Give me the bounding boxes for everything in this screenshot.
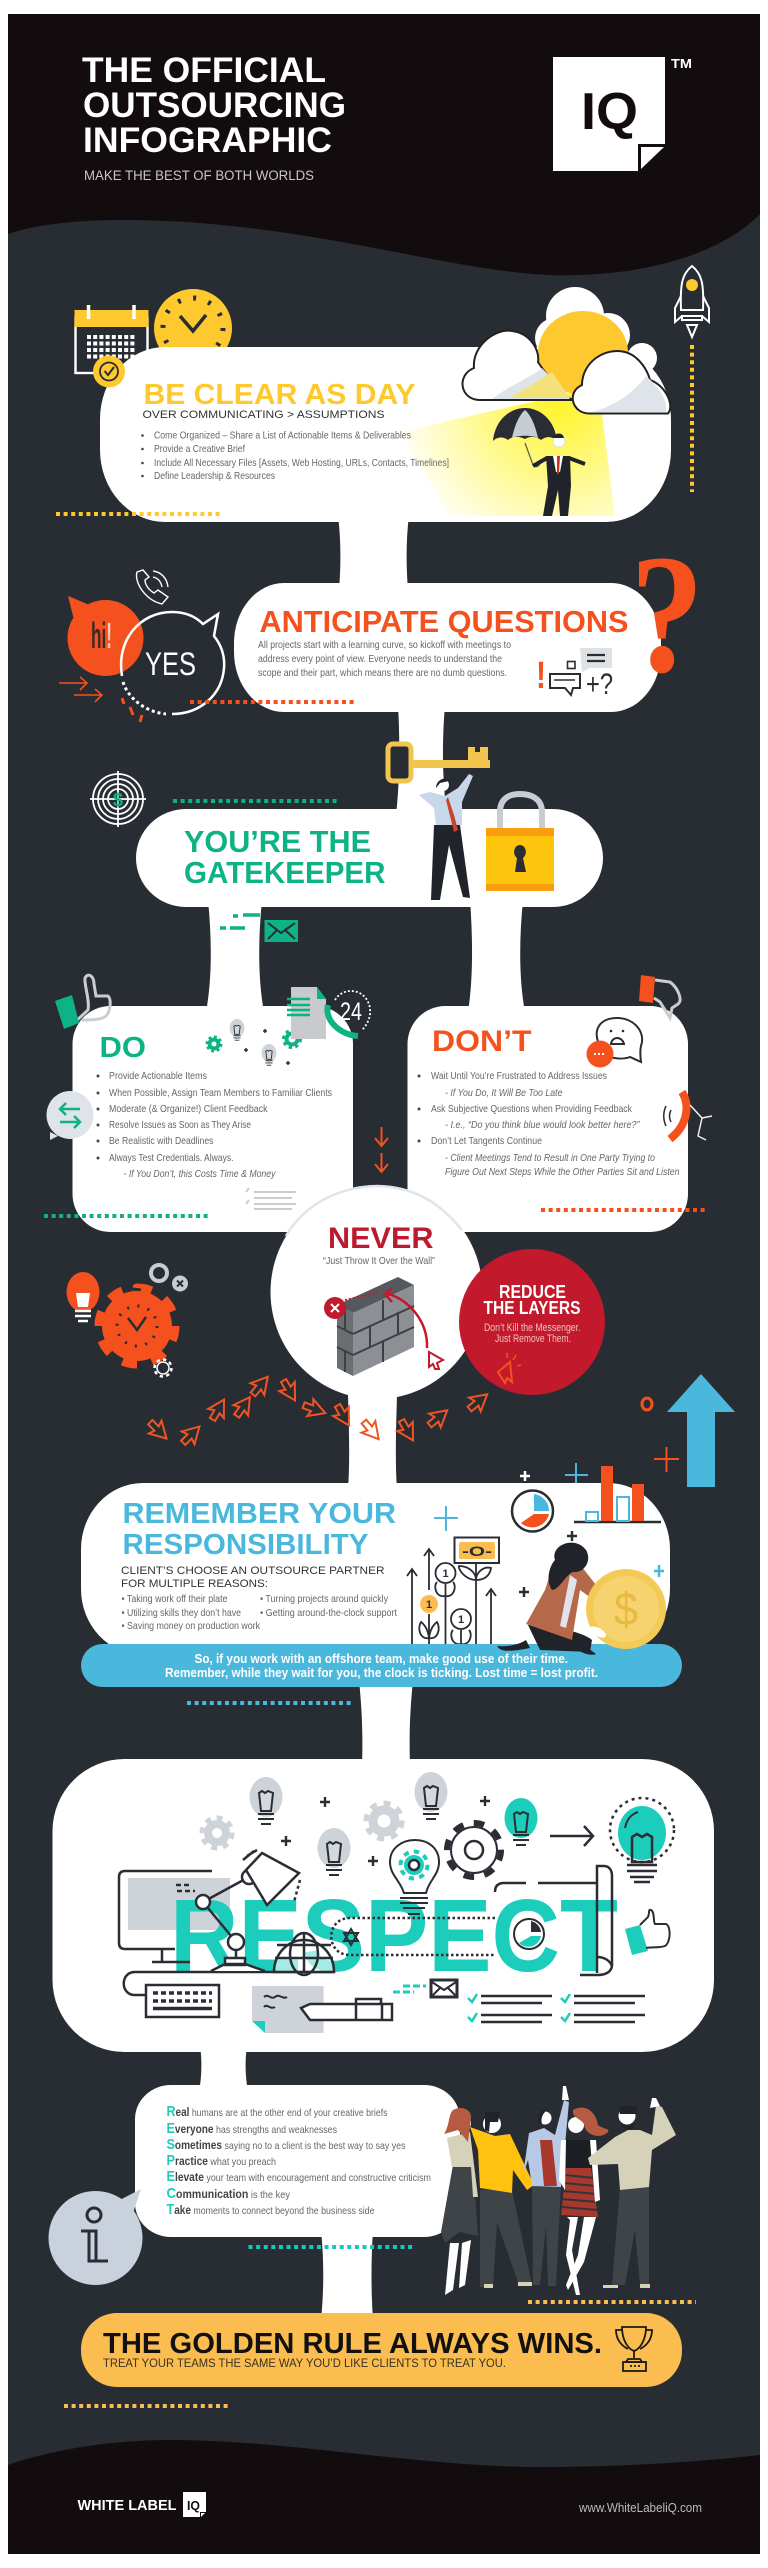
icon: target [90, 771, 146, 827]
icon: yes speech bubble [121, 612, 224, 714]
icon: key [388, 744, 490, 781]
bullet list: Moderate (& Organize!) Client Feedback [109, 1103, 268, 1115]
plant labels: 1 [426, 1599, 432, 1611]
line C: Communication is the key [166, 2185, 291, 2202]
callout: reduce the layers: Don’t Kill the Messenger. [484, 1322, 580, 1334]
bullet list: Figure Out Next Steps While the Other Parties Sit and Listen [445, 1166, 680, 1178]
icon: star gear [344, 1929, 358, 1945]
panel: anticipate questions [234, 583, 661, 712]
icon: brick wall [337, 1277, 414, 1376]
person 1: woman in grey skirt [441, 2108, 478, 2295]
reasons list: • Saving money on production work [122, 1620, 261, 1632]
header band [8, 14, 760, 275]
logo [553, 56, 692, 171]
illustration: money plants [407, 1538, 499, 1653]
title [82, 51, 346, 160]
subheading: FOR MULTIPLE REASONS: [121, 1578, 268, 1590]
plus marks: responsibility panel [434, 1506, 664, 1597]
banner: golden rule: TREAT YOUR TEAMS THE SAME WAY YOU’D LIKE CLIENTS TO TREAT YOU. [103, 2356, 506, 2370]
icon: discussion marks [536, 648, 613, 701]
icon: desk lamp [196, 1850, 300, 1971]
light beam [400, 392, 615, 516]
illustration: man with umbrella [493, 408, 585, 516]
bullet list: Provide a Creative Brief [154, 443, 245, 455]
panel: remember your responsibility [81, 1483, 670, 1655]
panel: don't [408, 1006, 688, 1232]
illustration: man reaching for key [419, 774, 473, 900]
icon: 24 hour phone: 24 [340, 998, 362, 1026]
callout: reduce the layers: Just Remove Them. [495, 1333, 571, 1345]
paragraph: All projects start with a learning curve, so kickoff with meetings to [258, 639, 511, 651]
icon: gear outline [447, 1823, 501, 1877]
arrows: orange [59, 677, 142, 722]
icon: document [287, 987, 326, 1039]
reasons list: • Utilizing skills they don’t have [122, 1607, 241, 1619]
icon: hi speech bubble [68, 596, 144, 676]
icon: phone [137, 570, 168, 604]
callout: reduce the layers [459, 1249, 605, 1395]
dotted line: yellow [56, 512, 223, 516]
bullet list: Provide Actionable Items [109, 1070, 207, 1082]
heading: GATEKEEPER [184, 856, 386, 890]
icons: plus marks [281, 1796, 490, 1866]
icon: envelope [393, 1980, 457, 1997]
illustration: woman and coin [497, 1543, 666, 1655]
heading: ANTICIPATE QUESTIONS [260, 604, 628, 639]
icon: target: $ [113, 790, 123, 810]
icon: discussion marks: +? [586, 668, 613, 701]
icon: scroll [495, 1866, 612, 1975]
icon: large teal bulb [610, 1798, 674, 1882]
subheading: OVER COMMUNICATING > ASSUMPTIONS [142, 409, 384, 421]
caption: “Just Throw It Over the Wall” [323, 1255, 435, 1267]
icons: small status circles and gear [151, 1265, 188, 1376]
panel: respect [52, 1759, 714, 2052]
icon: trophy [616, 2327, 652, 2371]
paragraph: address every point of view. Everyone needs to understand the [258, 653, 502, 665]
panel: you're the gatekeeper [136, 809, 603, 907]
paragraph [258, 639, 511, 679]
panel: be clear as day [100, 347, 671, 522]
bullet list [141, 430, 449, 482]
bullet list: - If You Do, It Will Be Too Late [445, 1087, 563, 1099]
icon: checklist [246, 1188, 296, 1209]
heading [184, 825, 386, 890]
icons: bulbs and gears [207, 1019, 300, 1065]
banner: golden rule [81, 2313, 682, 2387]
plant labels [426, 1543, 492, 1626]
connector: panel 1 to 2 [338, 515, 409, 590]
heading: RESPECT [170, 1878, 618, 1993]
heading: RESPONSIBILITY [122, 1529, 368, 1561]
panel: do [72, 1006, 353, 1232]
reasons list [122, 1593, 397, 1632]
dotted line: yellow [528, 2300, 696, 2304]
decorative marks: ring and plus [520, 1398, 679, 1487]
banner: lost time: So, if you work with an offshore team, make good use of their time. [194, 1651, 568, 1666]
paragraph: scope and their part, which means there are no dumb questions. [258, 667, 507, 679]
bullet list: Come Organized – Share a List of Actionable Items & Deliverables [154, 430, 411, 442]
connector: panel 2 to 3 [396, 705, 447, 815]
icon: thumbs up [625, 1910, 670, 1955]
icon: info bubble [48, 2189, 142, 2285]
line R: Real humans are at the other end of your creative briefs [166, 2103, 388, 2120]
dotted line: teal [248, 2245, 416, 2249]
footer logo [78, 2492, 206, 2517]
icon: thumbs up [55, 975, 110, 1029]
callout: reduce the layers: REDUCE [499, 1282, 566, 1302]
connector: respect to list [199, 2045, 248, 2092]
footer url: www.WhiteLabeliQ.com [578, 2500, 702, 2515]
icon: cursor click [498, 1353, 521, 1383]
connector: never to remember [348, 1395, 397, 1490]
banner: golden rule: THE GOLDEN RULE ALWAYS WINS. [103, 2328, 602, 2360]
icon: idea bulb with gear [390, 1840, 439, 1914]
bullet list: Include All Necessary Files [Assets, Web Hosting, URLs, Contacts, Timelines] [154, 457, 449, 469]
connector: list to golden rule [321, 2230, 373, 2320]
illustration: woman and coin: $ [614, 1583, 638, 1635]
dotted line: blue [187, 1701, 354, 1705]
person 3: woman in blue jacket [523, 2086, 569, 2286]
dotted line: yellow [64, 2404, 230, 2408]
illustration: sun and clouds [463, 287, 670, 414]
heading: DO [100, 1032, 146, 1064]
reasons list: • Getting around-the-clock support [260, 1607, 397, 1619]
icon: calendar check badge [93, 356, 125, 388]
icon: note and pen [252, 1986, 392, 2033]
arrows: down [375, 1127, 388, 1172]
bullet list [418, 1070, 680, 1178]
footer logo: IQ [187, 2498, 200, 2513]
heading: YOU’RE THE [184, 825, 371, 859]
bullet list: - Client Meetings Tend to Result in One Party Trying to [445, 1152, 655, 1164]
icon: discussion marks: ! [536, 655, 546, 697]
footer band [8, 2440, 760, 2554]
icon: computer and desk [119, 1871, 333, 2017]
icon: question mark: ? [630, 520, 704, 708]
bullet list: - If You Don’t, this Costs Time & Money [124, 1168, 276, 1180]
bullet list: Be Realistic with Deadlines [109, 1135, 214, 1147]
icon: envelope [220, 915, 298, 942]
person 2: man in yellow sweater [470, 2112, 534, 2287]
dotted line: rocket trail [690, 345, 694, 492]
banner: lost time: Remember, while they wait for you, the clock is ticking. Lost time = lost profit. [165, 1665, 598, 1680]
heading [122, 1498, 396, 1561]
heading: BE CLEAR AS DAY [144, 379, 416, 411]
bullet list: Define Leadership & Resources [154, 470, 275, 482]
title: INFOGRAPHIC [83, 121, 332, 160]
arrow: blue up [667, 1374, 735, 1487]
icons: grey gears [202, 1803, 402, 1848]
icon: 24 hour phone [327, 991, 370, 1036]
icon: checklists [468, 1994, 645, 2022]
panel: never [270, 1185, 482, 1399]
line P: Practice what you preach [166, 2152, 276, 2169]
heading: NEVER [328, 1222, 434, 1255]
icon: rocket [675, 266, 709, 337]
bullet list: When Possible, Assign Team Members to Familiar Clients [109, 1087, 332, 1099]
icon: swap bubble [46, 1091, 94, 1140]
title: OUTSOURCING [83, 86, 346, 125]
heading: REMEMBER YOUR [122, 1498, 396, 1530]
screen of monitor [128, 1878, 230, 1930]
illustration: group of people [441, 2086, 676, 2295]
icon: globe [274, 1932, 334, 1975]
line T: Take moments to connect beyond the business side [166, 2201, 375, 2218]
connector: remember to respect [359, 1680, 413, 1765]
icon: calendar [74, 305, 148, 373]
reasons list: • Taking work off their plate [122, 1593, 228, 1605]
line E: Everyone has strengths and weaknesses [166, 2120, 337, 2137]
logo: TM [671, 56, 692, 71]
icon: complaint bubble [586, 1018, 642, 1068]
dotted line: orange [541, 1208, 708, 1212]
icon: clock gear [99, 1288, 175, 1364]
bullet list: Always Test Credentials. Always. [109, 1152, 234, 1164]
reasons list: • Turning projects around quickly [260, 1593, 389, 1605]
icon: yes speech bubble: YES [145, 646, 196, 682]
plant labels: -O- [462, 1543, 492, 1559]
dotted line: orange [190, 700, 356, 704]
bullet list: Don’t Let Tangents Continue [431, 1135, 542, 1147]
line E2: Elevate your team with encouragement and constructive criticism [166, 2168, 431, 2185]
arrows: orange trail [144, 1371, 493, 1449]
title: THE OFFICIAL [82, 51, 326, 90]
icon: ringing phone [664, 1092, 712, 1140]
plant labels: 1 [442, 1568, 449, 1580]
dotted line: green [44, 1214, 211, 1218]
icons: grey bulbs [250, 1772, 538, 1875]
footer logo: WHITE LABEL [78, 2497, 176, 2514]
dotted track [331, 1918, 495, 1955]
icon: orange bulb [66, 1272, 100, 1321]
plant labels: 1 [458, 1614, 464, 1626]
icon: small pie [514, 1919, 544, 1949]
callout: reduce the layers: THE LAYERS [484, 1298, 580, 1318]
line S: Sometimes saying no to a client is the best way to say yes [166, 2136, 406, 2153]
bullet list [96, 1070, 332, 1180]
icon: padlock [486, 794, 554, 891]
bullet list: - I.e., “Do you think blue would look better here?” [445, 1119, 640, 1131]
person 5: man in beige sweater [484, 2098, 676, 2288]
icon: thumbs down [639, 975, 680, 1018]
bullet list: Resolve Issues as Soon as They Arise [109, 1119, 251, 1131]
icon: red throw arrow [324, 1288, 443, 1369]
bullet list: Ask Subjective Questions when Providing Feedback [431, 1103, 633, 1115]
subheading [121, 1565, 385, 1590]
banner: lost time [81, 1644, 682, 1687]
person 4: woman in striped skirt [559, 2108, 608, 2295]
dotted line: green [173, 799, 340, 803]
subtitle: MAKE THE BEST OF BOTH WORLDS [84, 168, 314, 183]
logo: IQ [581, 83, 638, 141]
panel: respect acronym list [135, 2085, 460, 2237]
bullet list: Wait Until You’re Frustrated to Address Issues [431, 1070, 607, 1082]
icon: clock [154, 289, 232, 367]
arrow [550, 1826, 593, 1846]
subheading: CLIENT’S CHOOSE AN OUTSOURCE PARTNER [121, 1565, 385, 1577]
chart: bars and pie [512, 1466, 661, 1532]
connectors: panel 3 to do and don't [206, 900, 525, 1012]
icon: hi speech bubble: hi! [91, 615, 112, 656]
heading: DON’T [432, 1025, 532, 1058]
